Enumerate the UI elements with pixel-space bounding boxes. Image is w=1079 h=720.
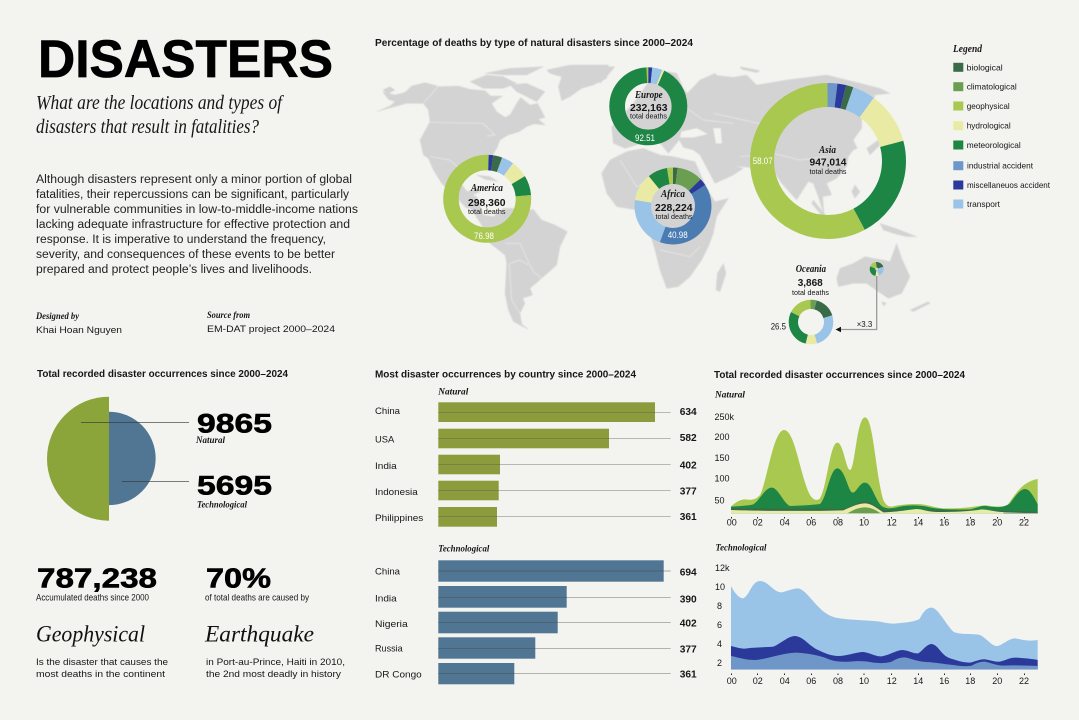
- bar chart: technological: 390: [680, 593, 697, 605]
- legend: climatological: [967, 82, 1017, 92]
- donut: Europe: 232,163: [630, 102, 668, 114]
- panel: key stat geophysical: Is the disaster that causes the: [36, 657, 168, 668]
- bar chart: natural: [375, 387, 697, 527]
- donut: Africa: [643, 176, 703, 240]
- donut: Oceania with magnifier arrow: Oceania: [796, 263, 826, 275]
- subtitle: What are the locations and types of: [36, 93, 284, 114]
- panel: key stat geophysical: [36, 562, 168, 680]
- area chart: technological: 12k: [715, 563, 730, 573]
- intro paragraph: [36, 174, 358, 276]
- bar chart: technological: 361: [680, 669, 697, 681]
- donut: Asia: 947,014: [810, 156, 847, 168]
- panel: key stat earthquake: of total deaths are caused by: [205, 593, 309, 603]
- donut: America: [451, 163, 523, 241]
- area chart: technological: 18: [965, 676, 975, 686]
- bar chart: technological: India: [375, 594, 397, 605]
- area chart: technological: 8: [717, 601, 722, 611]
- bar chart: technological: Technological: [438, 544, 490, 554]
- credit: designer: Khai Hoan Nguyen: [36, 325, 122, 336]
- panel: key stat earthquake: the 2nd most deadly in history: [206, 669, 341, 680]
- panel: bars by country: [375, 370, 697, 684]
- area chart: natural: 06: [806, 518, 816, 528]
- world map: [377, 65, 930, 329]
- area chart: technological: 20: [992, 676, 1002, 686]
- area chart: natural: 10: [859, 518, 869, 528]
- bar chart: technological: China: [375, 567, 401, 578]
- area chart: technological: 10: [859, 676, 869, 686]
- legend: geophysical: [967, 101, 1010, 111]
- bar chart: natural: 377: [680, 486, 697, 498]
- area chart: technological: 14: [913, 676, 923, 686]
- donut: Oceania with magnifier arrow: 3,868: [798, 277, 823, 289]
- area chart: technological: 04: [780, 676, 790, 686]
- area chart: technological: 16: [939, 676, 949, 686]
- panel: key stat earthquake: [204, 562, 345, 680]
- stat: natural count: [195, 408, 272, 446]
- intro paragraph: response. It is imperative to understand the frequency,: [36, 234, 326, 246]
- stat: natural count: Natural: [195, 436, 225, 446]
- area chart: technological: 08: [833, 676, 843, 686]
- subtitle: disasters that result in fatalities?: [36, 117, 259, 138]
- title: DISASTERS: [38, 30, 333, 89]
- area chart: technological: 00: [727, 676, 737, 686]
- area chart: technological: 12: [887, 676, 897, 686]
- stat: technological count: Technological: [197, 500, 247, 510]
- donut: Africa: 228,224: [655, 202, 693, 214]
- bar chart: technological: DR Congo: [375, 670, 422, 681]
- area chart: technological: 10: [715, 582, 725, 592]
- legend: hydrological: [967, 121, 1011, 131]
- credit: source: [207, 311, 335, 335]
- area chart: natural: 18: [965, 518, 975, 528]
- donut: Asia: 58.07: [753, 156, 773, 166]
- intro paragraph: prepared and protect people’s lives and livelihoods.: [36, 264, 312, 276]
- area chart: natural: 22: [1019, 518, 1029, 528]
- stat: technological count: 5695: [197, 470, 272, 500]
- credit: source: EM-DAT project 2000–2024: [207, 324, 335, 335]
- area chart: natural: 00: [727, 518, 737, 528]
- panel: key stat geophysical: most deaths in the continent: [36, 669, 165, 680]
- legend: industrial accident: [967, 161, 1034, 171]
- credit: designer: Designed by: [35, 312, 80, 322]
- donut: Africa: 40.98: [668, 230, 688, 240]
- intro paragraph: for vulnerable communities in low-to-middle-income nations: [36, 204, 358, 216]
- bar chart: technological: Nigeria: [375, 619, 408, 630]
- panel: introduction: [35, 30, 358, 336]
- mini Oceania donut on map: [872, 265, 881, 273]
- panel: key stat geophysical: 787,238: [37, 562, 157, 593]
- donut: America: America: [470, 182, 503, 194]
- donut: Europe: Europe: [634, 89, 663, 101]
- panel: key stat geophysical: Geophysical: [36, 622, 145, 647]
- donut: Asia: total deaths: [810, 167, 847, 176]
- legend: transport: [967, 199, 1001, 209]
- area chart: natural: 150: [714, 453, 730, 463]
- bar chart: natural: 361: [680, 511, 697, 523]
- bar chart: natural: Natural: [437, 387, 469, 397]
- credit: source: Source from: [207, 311, 250, 321]
- donut: Oceania with magnifier arrow: ×3.3: [857, 320, 873, 329]
- panel: key stat earthquake: in Port-au-Prince, Haiti in 2010,: [206, 657, 345, 668]
- panel: key stat geophysical: Accumulated deaths since 2000: [36, 593, 149, 603]
- area chart: natural: 200: [714, 432, 730, 442]
- bar chart: natural: Philippines: [375, 513, 424, 524]
- panel: key stat earthquake: Earthquake: [204, 622, 314, 647]
- credit: designer: [35, 312, 122, 336]
- legend: Legend: [952, 44, 983, 55]
- donut: America: 76.98: [474, 231, 494, 241]
- area chart: natural: 20: [992, 518, 1002, 528]
- area chart: technological: 6: [717, 620, 722, 630]
- legend: biological: [967, 62, 1003, 72]
- area chart: natural: 04: [780, 518, 790, 528]
- area chart: natural: 08: [833, 518, 843, 528]
- donut: Europe: [617, 75, 679, 143]
- bar chart: natural: 402: [680, 460, 697, 472]
- donut: Oceania with magnifier arrow: [771, 263, 881, 340]
- bar chart: technological: 694: [680, 566, 697, 578]
- panel: occurrences over time: [714, 370, 1038, 686]
- heading: Total recorded disaster occurrences since 2000–2024: [714, 370, 965, 381]
- area chart: natural: 16: [939, 518, 949, 528]
- bar chart: natural: USA: [375, 435, 395, 446]
- donut: America: 298,360: [468, 197, 506, 209]
- area chart: natural: 100: [714, 473, 730, 483]
- legend: [952, 44, 1051, 209]
- intro paragraph: severity, and consequences of these events to be better: [36, 249, 335, 261]
- donut: Europe: 92.51: [635, 133, 655, 143]
- bar chart: technological: 402: [680, 618, 697, 630]
- intro paragraph: lacking adequate infrastructure for effective protection and: [36, 219, 350, 231]
- donut: Africa: total deaths: [656, 212, 693, 221]
- area chart: natural: 50: [714, 495, 725, 505]
- bar chart: technological: [375, 544, 697, 684]
- bar chart: natural: India: [375, 461, 397, 472]
- area chart: technological: [715, 544, 1038, 686]
- subtitle: [36, 93, 284, 138]
- bar chart: natural: 634: [680, 406, 697, 418]
- area chart: technological: 22: [1019, 676, 1029, 686]
- bar chart: technological: Russia: [375, 644, 403, 655]
- donut: Africa: Africa: [660, 188, 685, 200]
- bar chart: technological: 377: [680, 644, 697, 656]
- heading: Most disaster occurrences by country since 2000–2024: [375, 370, 636, 381]
- area chart: technological: 2: [717, 658, 722, 668]
- stat: natural count: 9865: [197, 408, 272, 438]
- area chart: natural: [714, 391, 1038, 528]
- area chart: natural: 02: [753, 518, 763, 528]
- area chart: technological: 02: [753, 676, 763, 686]
- donut: Oceania with magnifier arrow: total deaths: [792, 288, 829, 297]
- area chart: natural: 250k: [714, 412, 735, 422]
- legend: meteorological: [967, 140, 1021, 150]
- heading: Total recorded disaster occurrences since 2000–2024: [37, 369, 288, 380]
- legend: miscellaneuos accident: [967, 180, 1051, 190]
- area chart: natural: Natural: [714, 391, 745, 401]
- donut: Asia: [753, 95, 894, 227]
- area chart: natural: 12: [887, 518, 897, 528]
- panel: total occurrences: [37, 369, 288, 521]
- arrow: [836, 276, 877, 332]
- area chart: natural: 14: [913, 518, 923, 528]
- area chart: technological: 06: [806, 676, 816, 686]
- donut: Asia: Asia: [818, 144, 836, 156]
- bar chart: natural: 582: [680, 432, 697, 444]
- area chart: technological: 4: [717, 639, 722, 649]
- bar chart: natural: Indonesia: [375, 487, 418, 498]
- stat: technological count: [197, 470, 272, 510]
- bar chart: natural: China: [375, 406, 401, 417]
- intro paragraph: fatalities, their repercussions can be significant, particularly: [36, 189, 349, 201]
- donut: Oceania with magnifier arrow: 26.5: [771, 322, 786, 332]
- panel: key stat earthquake: 70%: [206, 562, 271, 593]
- donut: Europe: total deaths: [630, 112, 667, 120]
- half circle chart: [47, 397, 189, 521]
- donut: America: total deaths: [468, 207, 506, 216]
- heading: map: Percentage of deaths by type of natural disasters since 2000–2024: [375, 38, 693, 49]
- area chart: technological: Technological: [716, 544, 767, 554]
- intro paragraph: Although disasters represent only a minor portion of global: [36, 174, 352, 186]
